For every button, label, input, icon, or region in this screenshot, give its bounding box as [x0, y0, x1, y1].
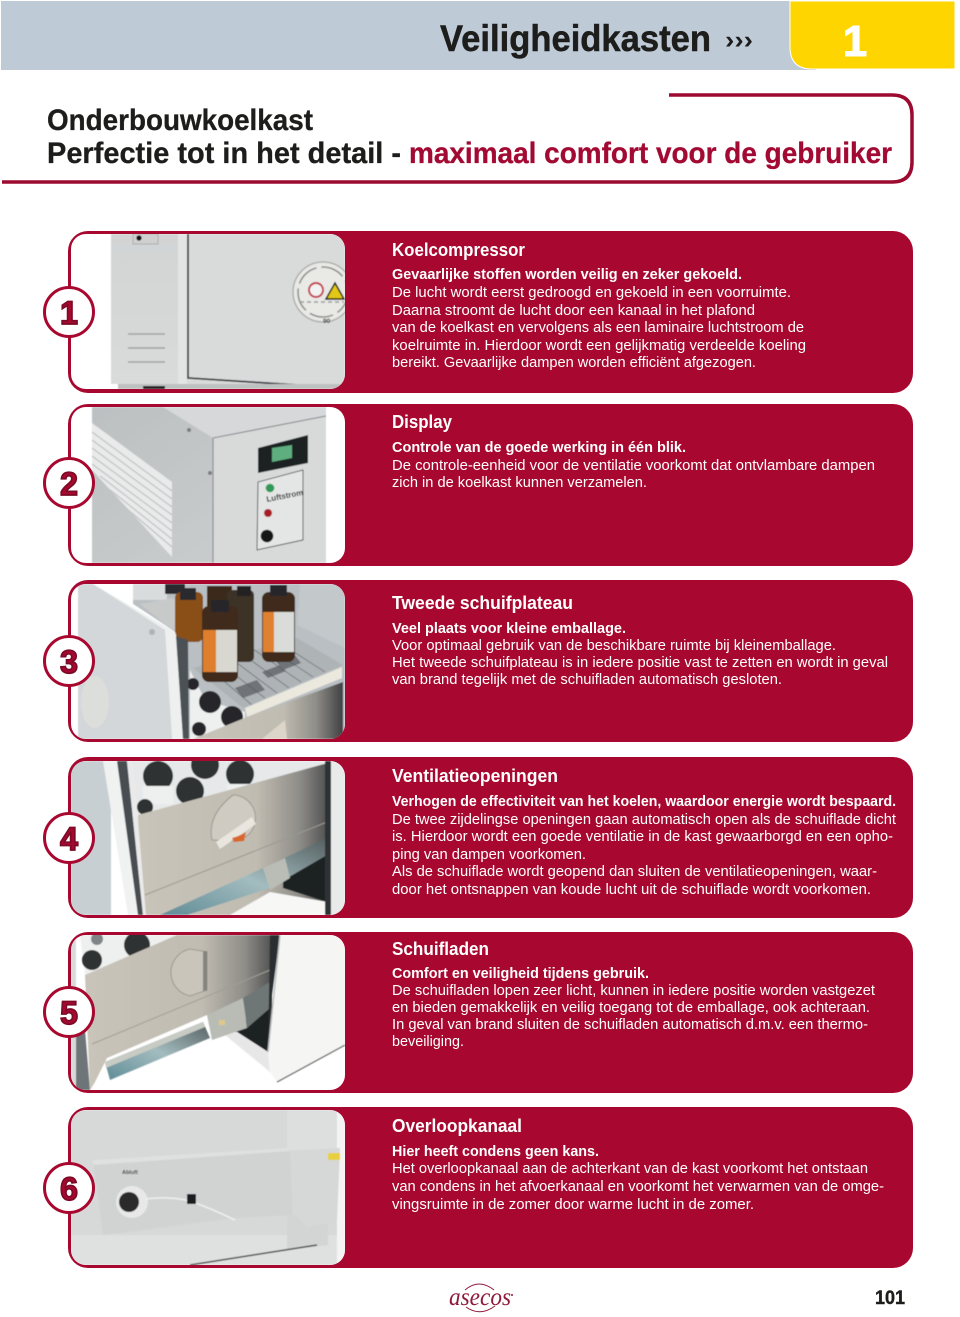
photo: control unit	[92, 407, 326, 563]
panel 5 heading: Schuifladen	[392, 938, 489, 959]
panel 4 text: is. Hierdoor wordt een goede ventilatie in de kast gewaarborgd en een opho-	[392, 829, 893, 845]
panel 1 text: Daarna stroomt de lucht door een kanaal in het plafond	[392, 303, 755, 319]
panel 5 text: De schuifladen lopen zeer licht, kunnen in iedere positie worden vastgezet	[392, 983, 875, 999]
main heading: maximaal comfort voor de gebruiker	[409, 137, 892, 170]
number badge 1	[44, 288, 94, 336]
panel 2 heading: Display	[392, 411, 453, 432]
number badge 2: 2	[60, 466, 78, 502]
number badge 2	[44, 458, 94, 508]
panel 4 text: Als de schuiflade wordt geopend dan sluiten de ventilatieopeningen, waar-	[392, 864, 877, 880]
panel 6: Overloopkanaal	[44, 1107, 913, 1268]
panel 2 text	[392, 440, 875, 491]
panel 3 text: van brand tegelijk met de schuifladen automatisch gesloten.	[392, 672, 782, 688]
header bar	[1, 1, 955, 70]
photo: sliding shelf with bottles	[78, 584, 345, 739]
number badge 1: 1	[60, 295, 78, 331]
panel 6 text: Het overloopkanaal aan de achterkant van de kast voorkomt het ontstaan	[392, 1161, 868, 1177]
panel 4 heading: Ventilatieopeningen	[392, 765, 558, 786]
panel 1 text: Gevaarlijke stoffen worden veilig en zeker gekoeld.	[392, 267, 742, 283]
panel 1 text: bereikt. Gevaarlijke dampen worden efficiënt afgezogen.	[392, 355, 756, 371]
page number: 101	[875, 1288, 905, 1309]
number badge 6	[44, 1164, 94, 1212]
panel 5: Schuifladen	[44, 932, 913, 1093]
panel 1: Koelcompressor	[44, 231, 913, 393]
panel 2 text: Controle van de goede werking in één blik.	[392, 440, 686, 456]
panel 2 text: zich in de koelkast kunnen verzamelen.	[392, 475, 647, 491]
photo: control unit: Luftstrom	[266, 488, 304, 504]
panel 6 text	[392, 1144, 884, 1213]
photo: overflow channel: Abluft	[122, 1170, 138, 1176]
main heading	[47, 104, 892, 170]
panel 3 text: Het tweede schuifplateau is in iedere positie vast te zetten en wordt in geval	[392, 655, 888, 671]
panel 5 text: en bieden gemakkelijk en veilig toegang tot de emballage, ook achteraan.	[392, 1000, 870, 1016]
panel 6 text: Hier heeft condens geen kans.	[392, 1144, 599, 1160]
title frame	[2, 95, 912, 182]
header title: Veiligheidkasten	[440, 18, 711, 59]
panel 3: Tweede schuifplateau	[44, 580, 913, 742]
panel 4: Ventilatieopeningen	[44, 751, 913, 918]
panel 5 text	[392, 966, 875, 1050]
panel 2: Display	[44, 404, 913, 566]
panel 4 text: ping van dampen voorkomen.	[392, 847, 586, 863]
panel 3 text: Voor optimaal gebruik van de beschikbare ruimte bij kleinemballage.	[392, 638, 836, 654]
photo: overflow channel	[71, 1110, 345, 1265]
photo: drawer vent opening	[71, 751, 345, 915]
panel 6 text: vingsruimte in de zomer door warme lucht in de zomer.	[392, 1197, 754, 1213]
number badge 3	[44, 636, 94, 686]
main heading: Perfectie tot in het detail -	[47, 137, 401, 170]
yellow chapter tab	[790, 1, 955, 69]
number badge 4	[44, 814, 94, 862]
panel 2 text: De controle-eenheid voor de ventilatie voorkomt dat ontvlambare dampen	[392, 458, 875, 474]
panel 4 text: door het ontsnappen van koude lucht uit de schuiflade wordt voorkomen.	[392, 882, 871, 898]
panel 6 heading: Overloopkanaal	[392, 1115, 522, 1136]
panel 4 text	[392, 794, 896, 898]
panel 1 text: De lucht wordt eerst gedroogd en gekoeld in een voorruimte.	[392, 285, 791, 301]
number badge 5	[44, 988, 94, 1036]
logo: asecos: asecos	[449, 1284, 511, 1311]
photo: drawer slide rails	[71, 932, 345, 1090]
panel 5 text: beveiliging.	[392, 1034, 464, 1050]
main heading: Onderbouwkoelkast	[47, 104, 313, 137]
panel 1 heading: Koelcompressor	[392, 239, 525, 260]
number badge 3: 3	[60, 644, 78, 680]
chapter number: 1	[843, 17, 867, 66]
panel 1 text: van de koelkast en vervolgens als een laminaire luchtstroom de	[392, 320, 804, 336]
number badge 5: 5	[60, 995, 78, 1031]
panel 3 heading: Tweede schuifplateau	[392, 592, 573, 613]
panel 5 text: Comfort en veiligheid tijdens gebruik.	[392, 966, 649, 982]
number badge 4: 4	[60, 821, 78, 857]
panel 4 text: Verhogen de effectiviteit van het koelen, waardoor energie wordt bespaard.	[392, 794, 896, 810]
panel 3 text: Veel plaats voor kleine emballage.	[392, 621, 626, 637]
photo: cabinet front: 90	[323, 318, 331, 325]
panel 1 text: koelruimte in. Hierdoor wordt een gelijkmatig verdeelde koeling	[392, 338, 806, 354]
photo: cabinet front	[111, 234, 353, 389]
panel 3 text	[392, 621, 888, 688]
panel 4 text: De twee zijdelingse openingen gaan automatisch open als de schuiflade dicht	[392, 812, 896, 828]
panel 6 text: van condens in het afvoerkanaal en voorkomt het verwarmen van de omge-	[392, 1179, 884, 1195]
chevrons: ›››	[725, 26, 753, 54]
number badge 6: 6	[60, 1171, 78, 1207]
panel 1 text	[392, 267, 806, 371]
panel 5 text: In geval van brand sluiten de schuifladen automatisch d.m.v. een thermo-	[392, 1017, 868, 1033]
